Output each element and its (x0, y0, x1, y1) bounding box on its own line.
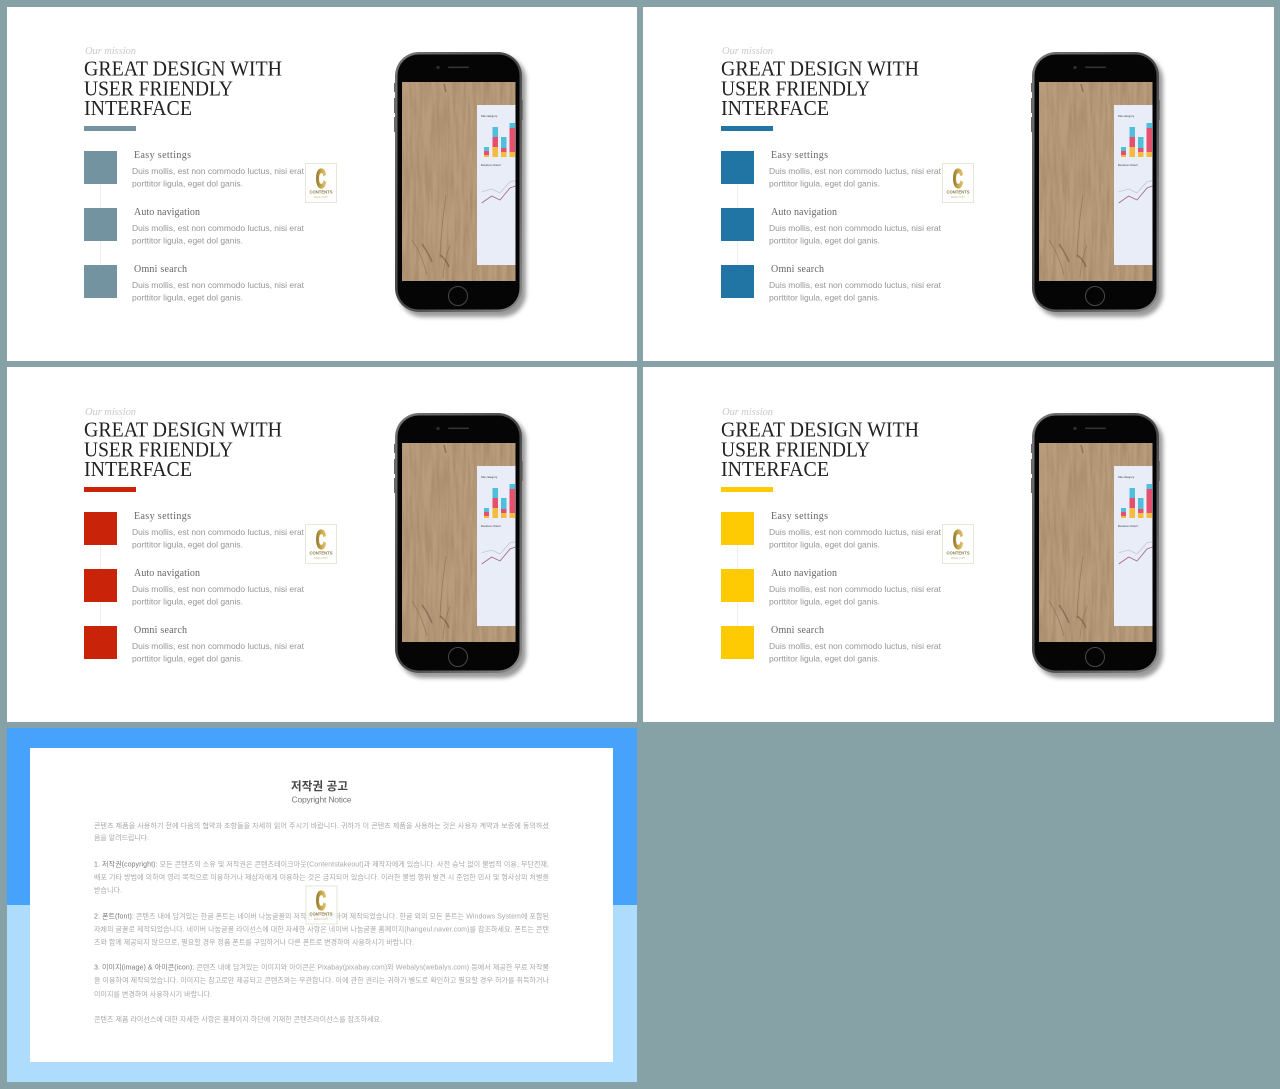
copyright heading: 저작권 공고 (291, 779, 348, 793)
list item: easy settings: Easy settings (134, 511, 191, 522)
watermark logo: C (316, 164, 326, 194)
watermark logo: C (316, 886, 326, 916)
phone mockup: Business Smart (481, 524, 501, 528)
watermark logo: MAKE COPY (314, 918, 329, 921)
copyright intro text (94, 821, 550, 842)
list item: easy settings: Duis mollis, est non commodo luctus, nisi erat (769, 527, 942, 537)
clause 3: image and icon: 이미지를 변경하여 사용하시기 바랍니다. (94, 990, 212, 998)
phone mockup: Site category (481, 114, 498, 118)
list item: auto navigation: Duis mollis, est non commodo luctus, nisi erat (769, 223, 942, 233)
list item: omni search: Duis mollis, est non commodo luctus, nisi erat (132, 641, 305, 651)
watermark logo: CONTENTS (946, 190, 970, 194)
watermark logo: MAKE COPY (951, 557, 966, 560)
title: GREAT DESIGN WITH (721, 418, 919, 442)
list item: auto navigation: porttitor ligula, eget dol ganis. (769, 596, 880, 606)
list item: omni search: Omni search (771, 625, 824, 636)
clause 1: copyright: 받습니다. (94, 886, 122, 894)
list item: auto navigation: Duis mollis, est non commodo luctus, nisi erat (132, 223, 305, 233)
panel: blue slide (643, 7, 1274, 361)
closing note: 콘텐츠 제품 라이선스에 대한 자세한 사항은 홈페이지 하단에 기재한 콘텐츠라이선스를 참조하세요. (94, 1014, 382, 1024)
list item: auto navigation: Auto navigation (771, 207, 837, 218)
list item: omni search: porttitor ligula, eget dol ganis. (132, 654, 243, 664)
phone mockup (394, 413, 526, 678)
list item: auto navigation: Duis mollis, est non commodo luctus, nisi erat (132, 584, 305, 594)
phone mockup (1031, 52, 1163, 317)
title: GREAT DESIGN WITH (721, 56, 919, 80)
list item: easy settings: Easy settings (771, 511, 828, 522)
watermark logo: CONTENTS (309, 912, 333, 916)
watermark logo (306, 164, 336, 202)
list item: auto navigation (721, 207, 942, 246)
panel: slate slide (7, 7, 637, 361)
clause 3: image and icon: 3. 이미지(image) & 아이콘(icon): 콘텐츠 내에 담겨있는 이미지와 아이콘은 Pixabay(pixabay.com)와 Webalys(webalys.com) 등에서 제공한 무료 저작물 (94, 962, 550, 972)
list item: auto navigation (84, 568, 305, 606)
eyebrow: our mission: Our mission (85, 407, 136, 418)
list item: omni search: porttitor ligula, eget dol ganis. (769, 292, 880, 302)
watermark logo (306, 886, 337, 924)
list item: omni search: Duis mollis, est non commodo luctus, nisi erat (769, 280, 942, 290)
list item: omni search (84, 264, 305, 302)
eyebrow: our mission: Our mission (85, 46, 136, 57)
clause 2: font: 츠와 함께 제공되지 않으므로, 필요할 경우 정품 폰트를 구입하거나 다른 폰트로 변경하여 사용하시기 바랍니다. (94, 938, 414, 946)
list item: auto navigation: porttitor ligula, eget dol ganis. (132, 596, 243, 606)
list item: easy settings: porttitor ligula, eget dol ganis. (769, 540, 880, 550)
list item: omni search: Omni search (134, 625, 187, 636)
watermark logo: C (953, 164, 963, 194)
title: USER FRIENDLY (84, 76, 233, 100)
title (84, 418, 282, 481)
watermark logo: CONTENTS (309, 190, 333, 194)
title accent bar (721, 126, 773, 131)
list item: omni search: porttitor ligula, eget dol ganis. (769, 654, 880, 664)
list item: omni search: Duis mollis, est non commodo luctus, nisi erat (132, 280, 305, 290)
list item: easy settings: porttitor ligula, eget dol ganis. (132, 178, 243, 188)
title (721, 56, 919, 120)
panel: red slide (7, 367, 637, 722)
list item: easy settings: porttitor ligula, eget dol ganis. (132, 540, 243, 550)
phone mockup: Business Smart (1118, 524, 1138, 528)
watermark logo: CONTENTS (946, 550, 970, 556)
phone mockup: Business Smart (1118, 163, 1138, 167)
title: USER FRIENDLY (721, 76, 870, 100)
list item: omni search: Omni search (771, 264, 824, 275)
clause 2: font: 자체의 글꼴로 제작되었습니다. 네이버 나눔글꼴 라이선스에 대한 자세한 사항은 네이버 나눔글꼴 홈페이지(hangeul.naver.com)를 참조하세요. 폰트는 콘텐 (94, 924, 549, 934)
list item: easy settings: Easy settings (771, 150, 828, 161)
watermark logo: MAKE COPY (314, 557, 329, 560)
list item: omni search: Omni search (134, 264, 187, 275)
watermark logo (306, 524, 336, 564)
watermark logo (942, 164, 974, 202)
clause 1: copyright: 배포 기타 방법에 의하여 영리 목적으로 이용하거나 제삼자에게 이용하는 것은 금지되어 있습니다. 이러한 불법 행위 발견 시 준엄한 민사 및 형사상의 처벌을 (94, 872, 550, 882)
list item: easy settings: Easy settings (134, 150, 191, 161)
list item: auto navigation: Auto navigation (771, 568, 837, 579)
phone mockup: Site category (481, 475, 498, 479)
title accent bar (84, 487, 136, 492)
title: GREAT DESIGN WITH (84, 418, 282, 442)
list item: auto navigation (721, 568, 942, 606)
title: USER FRIENDLY (84, 437, 233, 461)
title: INTERFACE (84, 96, 192, 120)
title: INTERFACE (84, 457, 192, 481)
list item: easy settings (84, 511, 305, 550)
copyright intro text: 콘텐츠 제품을 사용하기 전에 다음의 협약과 조항들을 자세히 읽어 주시기 바랍니다. 귀하가 이 콘텐츠 제품을 사용하는 것은 사용자 계약과 보증에 동의하셨 (94, 821, 550, 830)
list item: easy settings (84, 150, 305, 188)
list item: auto navigation: porttitor ligula, eget dol ganis. (769, 236, 880, 246)
clause 1: copyright (94, 860, 550, 894)
list item: easy settings (721, 150, 942, 188)
list item: omni search (84, 625, 305, 664)
list item: omni search (721, 264, 942, 302)
clause 3: image and icon (94, 962, 550, 998)
title: GREAT DESIGN WITH (84, 56, 282, 80)
phone mockup: Site category (1118, 475, 1135, 479)
title (721, 418, 919, 481)
copyright heading: Copyright Notice (292, 794, 352, 804)
eyebrow: our mission: Our mission (722, 46, 773, 57)
list item: easy settings: porttitor ligula, eget dol ganis. (769, 178, 880, 188)
list item: auto navigation: Auto navigation (134, 568, 200, 579)
panel: yellow slide (643, 367, 1274, 722)
title accent bar (84, 126, 136, 131)
list item: auto navigation: Auto navigation (134, 207, 200, 218)
title: USER FRIENDLY (721, 437, 870, 461)
title (84, 56, 282, 120)
list item: auto navigation (84, 207, 305, 246)
list item: auto navigation: Duis mollis, est non commodo luctus, nisi erat (769, 584, 942, 594)
phone mockup: Business Smart (481, 163, 501, 167)
title accent bar (721, 487, 773, 492)
panel: copyright notice (7, 728, 637, 1082)
copyright heading (291, 779, 352, 804)
phone mockup: Site category (1118, 114, 1135, 118)
watermark logo: C (953, 524, 963, 554)
watermark logo: MAKE COPY (314, 196, 329, 199)
watermark logo: MAKE COPY (951, 196, 966, 199)
clause 1: copyright: 1. 저작권(copyright): 모든 콘텐츠의 소유 및 저작권은 콘텐츠테이크아웃(Contentstakeout)과 제작자에게 있습니다. 사전 승낙 없이 불법적 이용, 무단전재, (94, 860, 549, 868)
copyright intro text: 음을 알려드립니다. (94, 833, 149, 842)
list item: omni search: Duis mollis, est non commodo luctus, nisi erat (769, 641, 942, 651)
watermark logo (942, 524, 974, 564)
list item: easy settings: Duis mollis, est non commodo luctus, nisi erat (132, 166, 305, 176)
list item: omni search: porttitor ligula, eget dol ganis. (132, 292, 243, 302)
phone mockup (1031, 413, 1163, 678)
clause 2: font: 2. 폰트(font): 콘텐츠 내에 담겨있는 한글 폰트는 네이버 나눔글꼴의 저작권을 기반하여 제작되었습니다. 한글 외의 모든 폰트는 Windows System에 포함된 (94, 912, 549, 920)
clause 2: font (94, 912, 549, 946)
watermark logo: C (316, 524, 326, 554)
list item: auto navigation: porttitor ligula, eget dol ganis. (132, 236, 243, 246)
clause 3: image and icon: 을 이용하여 제작되었습니다. 이미지는 참고로만 제공되고 콘텐츠와는 무관합니다. 이에 관한 권리는 귀하가 별도로 확인하고 필요할 경우 허가를 취득하거나 (94, 976, 550, 984)
list item: easy settings: Duis mollis, est non commodo luctus, nisi erat (132, 527, 305, 537)
watermark logo: CONTENTS (309, 550, 333, 556)
eyebrow: our mission: Our mission (722, 407, 773, 418)
list item: easy settings (721, 511, 942, 550)
title: INTERFACE (721, 457, 829, 481)
phone mockup (394, 52, 526, 317)
title: INTERFACE (721, 96, 829, 120)
list item: easy settings: Duis mollis, est non commodo luctus, nisi erat (769, 166, 942, 176)
list item: omni search (721, 625, 942, 664)
